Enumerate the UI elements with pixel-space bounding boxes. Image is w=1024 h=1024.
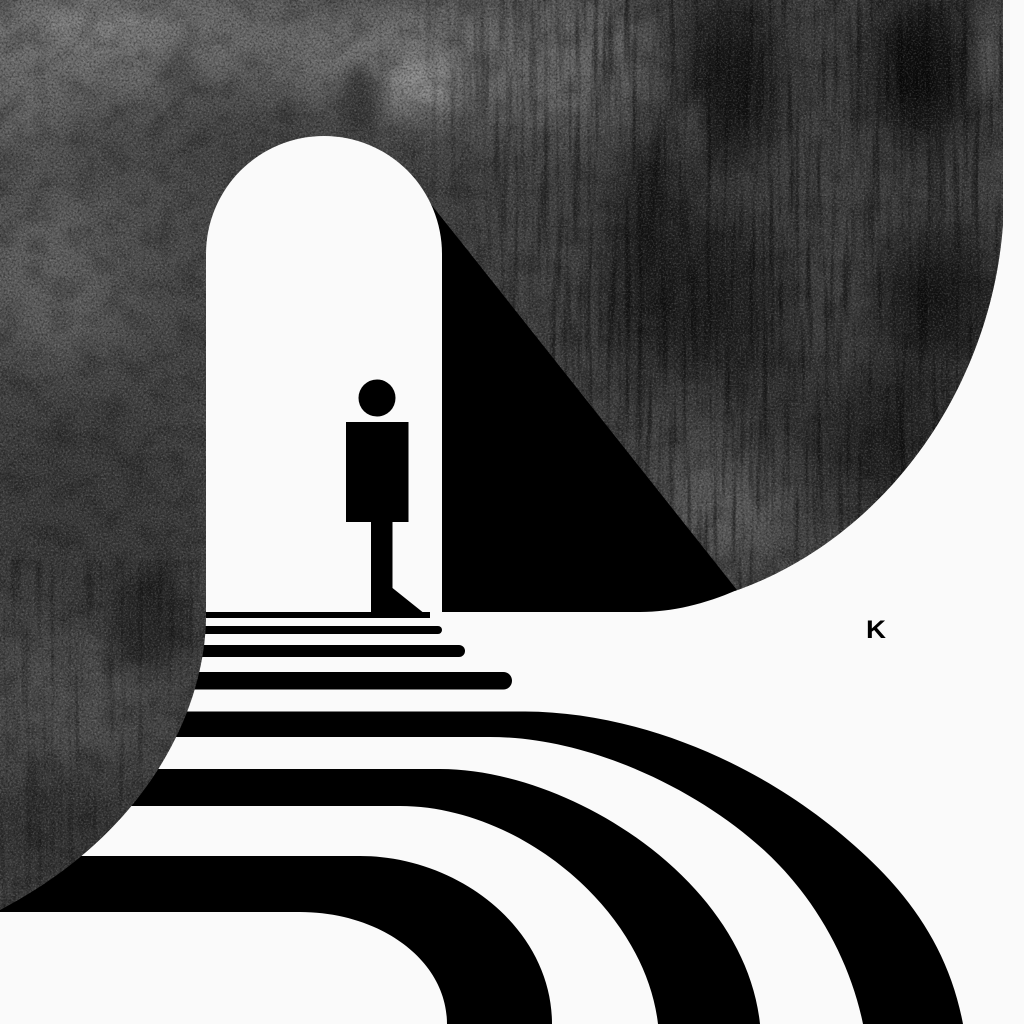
band 5: curved xyxy=(150,712,963,1024)
wall light scuffs xyxy=(35,9,1004,670)
black triangular shadow beside the doorway xyxy=(431,204,737,612)
band 7: curved xyxy=(0,856,552,1024)
striped path: curved and straight black bands xyxy=(0,626,963,1024)
figure leg and cast shadow xyxy=(371,522,430,618)
band 2 xyxy=(190,626,442,634)
signature mark: K xyxy=(866,616,886,644)
arched doorway of light xyxy=(206,136,442,612)
band 4 xyxy=(180,672,512,690)
band 6: curved xyxy=(100,769,760,1024)
figure head xyxy=(358,380,396,416)
band 1 across the doorway floor xyxy=(206,612,430,618)
band 3 xyxy=(190,645,465,657)
standing figure xyxy=(346,380,430,618)
figure body xyxy=(346,422,408,522)
